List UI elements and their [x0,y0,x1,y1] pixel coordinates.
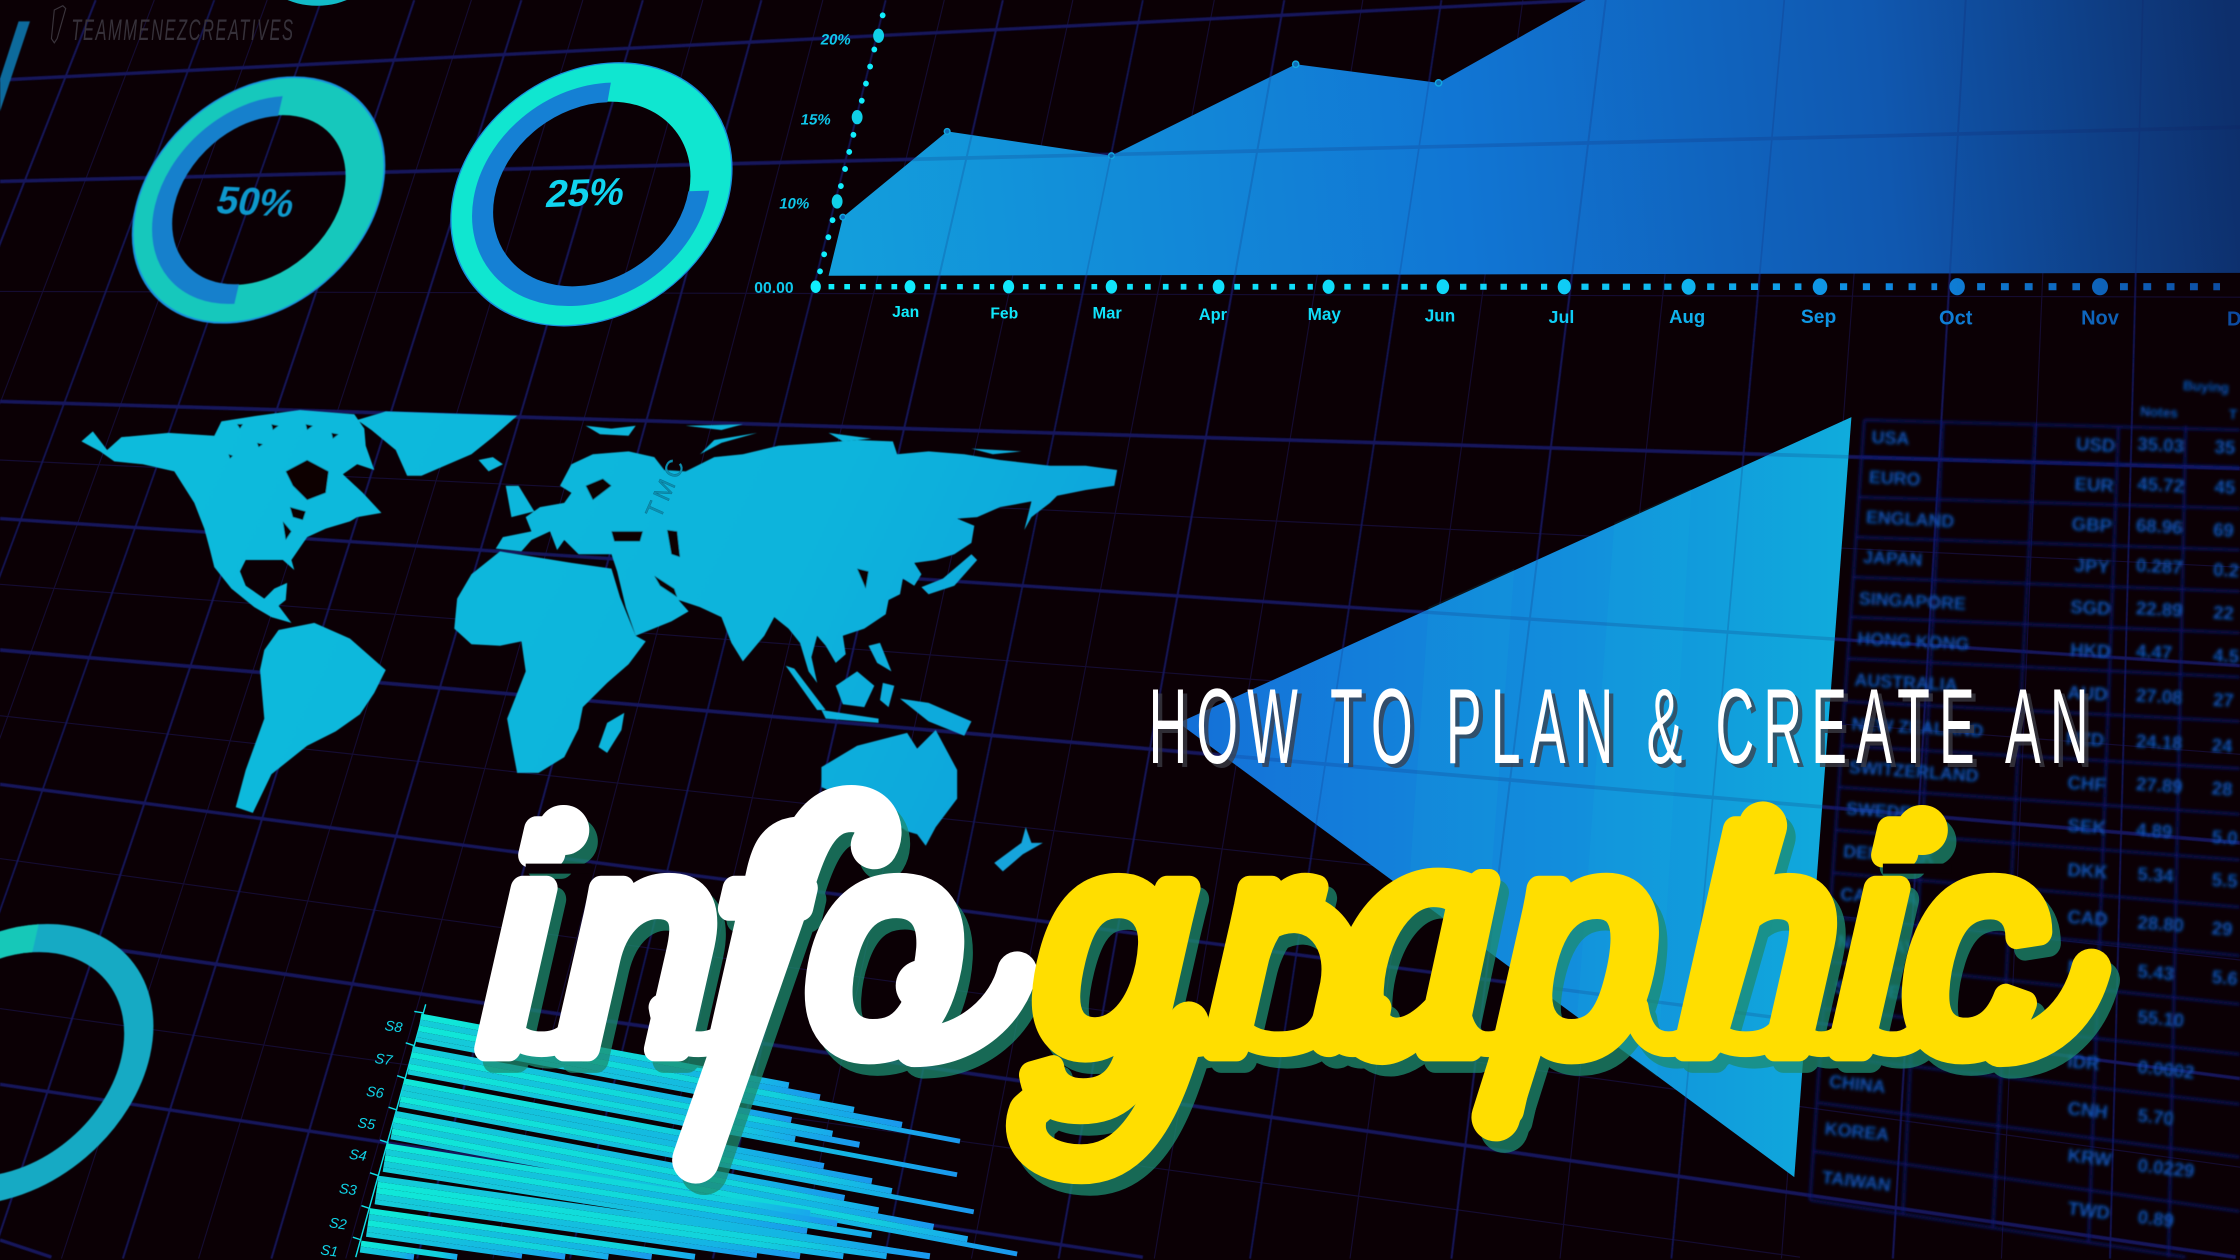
currency codes: KRW [2067,1145,2113,1170]
triangle [1179,417,1851,1177]
currency codes: CHF [2067,772,2106,795]
country names: SWITZERLAND [1848,757,1979,786]
subtitle text: HOW TO PLAN & CREATE AN [1149,665,2089,786]
rate values: 24.18 [2136,730,2183,754]
faint watermark on map: TMC [641,452,692,522]
rate values: 5.43 [2137,960,2175,984]
second rate column: 45 [2214,476,2236,498]
partial bar at top left [0,21,30,111]
second rate column: 35 [2214,436,2236,458]
donut segment 50% [143,106,280,299]
rate values: 5.34 [2137,863,2175,887]
hudson bay and inland seas [229,424,869,597]
x axis month labels: Mar [1093,305,1122,323]
country names: USA [1871,427,1910,449]
currency codes: GBP [2071,513,2112,536]
donut rim 50% [109,71,408,329]
y axis dots [820,3,886,271]
ring highlight [0,938,35,1072]
country names: KOREA [1824,1118,1890,1145]
currency codes: SGD [2070,596,2111,619]
script swashes and joins [1026,826,2091,1164]
rate values: 4.47 [2136,640,2173,663]
country names: CANADA [1840,884,1918,909]
currency codes: CNH [2067,1097,2109,1122]
britain and ireland [506,486,534,517]
graphic text: graphic [1027,730,2054,1126]
bars [360,1014,1022,1260]
currency codes: HKD [2070,639,2111,662]
iceland [479,457,503,471]
donut rim 25% [432,60,751,329]
country names: SINGAPORE [1858,588,1966,614]
icon: pencil [51,6,66,43]
rate values: 4.89 [2135,819,2173,842]
series labels: S5 [357,1115,376,1134]
rate values: 68.96 [2136,514,2183,538]
rate values: 5.70 [2137,1105,2175,1129]
currency codes: TWD [2067,1197,2111,1223]
series labels: S6 [365,1084,385,1102]
grid seen through panels [911,0,2071,1098]
chart area [829,0,2240,276]
rate values: 0.0229 [2137,1155,2195,1181]
label 50%: 50% [212,179,299,226]
label 25%: 25% [543,171,628,216]
currency codes: EUR [2074,473,2115,496]
x axis month labels: Jul [1549,307,1574,327]
new zealand [994,827,1043,871]
x axis month labels: Sep [1801,307,1836,328]
partial donut at top edge [266,0,369,6]
rate values: 22.89 [2136,597,2183,621]
donut segment 25% [466,89,717,299]
graphic shadow [1034,742,2100,1176]
second rate column: 5.6 [2211,966,2239,989]
series labels [319,1018,403,1260]
x axis month labels: Nov [2081,307,2120,329]
country names: SWEDEN [1845,798,1925,824]
rate values: 35.03 [2137,433,2184,456]
ring [0,931,164,1198]
second rate column [2211,436,2240,989]
donut: 50% [109,71,408,329]
table grid [1810,420,2240,1257]
title: graphic [1026,730,2100,1176]
currency codes: JPY [2074,554,2111,577]
y axis labels: 20% [819,31,853,48]
x axis month labels: Oct [1939,307,1973,329]
currency table [1810,378,2240,1257]
x axis month labels: Jun [1425,305,1455,325]
script swashes and joins [501,809,1017,1160]
rate values: 27.89 [2135,773,2183,797]
subtitle shadow: HOW TO PLAN & CREATE AN [1153,670,2093,790]
axis [356,1004,426,1257]
currency codes: NZD [2066,727,2105,750]
rate values: 0.0002 [2137,1056,2195,1083]
series labels: S2 [328,1215,348,1234]
title: info [478,775,1026,1171]
second rate column: 29 [2211,917,2233,940]
rate values: 27.08 [2136,684,2183,708]
x axis month nodes [811,278,2108,295]
area chart [754,0,2240,331]
y axis labels: 10% [778,196,811,213]
x axis month labels: May [1308,304,1341,324]
currency codes: AUD [2067,682,2108,705]
currency codes: NOK [2067,956,2110,980]
donut ring 25% [454,79,729,310]
second rate column: 69 [2213,519,2234,541]
arctic islands [586,424,1021,454]
country names: NORWAY [1837,931,1917,958]
rate values [2135,433,2195,1231]
currency codes: SEK [2067,814,2107,838]
series labels: S4 [348,1147,368,1165]
table headers [2140,378,2238,422]
country names: CHINA [1828,1071,1887,1097]
rate values: 55.10 [2137,1006,2185,1031]
country names: ENGLAND [1866,507,1955,531]
info lettering [478,775,1017,1160]
graphic lettering [1026,730,2091,1164]
eurasia [496,440,1117,683]
currency codes [2066,433,2116,1223]
x axis month labels: Jan [892,304,919,321]
data nodes [840,61,1442,220]
south america [236,623,386,813]
second rate column: 4.5 [2213,644,2240,667]
triangle panel stripes [1409,489,1691,1077]
x axis month labels [892,304,2240,331]
country names: JAPAN [1863,547,1923,570]
country names: TAIWAN [1821,1167,1892,1195]
subtitle [1149,665,2093,790]
gap under the i dot [1883,865,1951,872]
x axis dots [829,285,2220,289]
rate values: 28.80 [2137,912,2185,936]
x axis month labels: Apr [1199,306,1228,324]
indonesia and philippines [786,643,971,736]
north america [81,410,381,623]
country names: EURO [1868,467,1921,490]
second rate column: 5.5 [2211,869,2238,892]
axis ticks [353,1011,423,1240]
series labels: S3 [338,1181,358,1199]
second rate column: 22 [2213,602,2234,624]
bottom-left donut [0,931,164,1198]
gap under the i dot [526,865,591,872]
country names: AUSTRALIA [1854,670,1958,695]
triangle panel [1179,417,1851,1177]
second rate column: 28 [2211,777,2233,800]
series labels: S8 [384,1018,403,1036]
currency codes: DKK [2067,859,2109,883]
watermark text: TEAMMENEZCREATIVES [71,14,293,47]
horizontal bar chart [319,1004,1022,1260]
country names: NEW ZEALAND [1851,714,1984,741]
second rate column: 24 [2211,734,2234,757]
y axis labels: 00.00 [754,280,794,297]
second rate column: 0.2 [2213,559,2240,581]
madagascar [599,713,624,753]
currency codes: USD [2076,433,2116,456]
world map [81,410,1117,871]
country names: DENMARK [1843,841,1935,868]
x axis month labels: Aug [1669,306,1705,327]
table headers: T [2228,407,2238,422]
table headers: Notes [2140,404,2178,421]
info text: info [478,775,970,1114]
australia [821,730,957,846]
rate values: 0.89 [2137,1206,2175,1231]
country names: SWEDEN [1834,977,1914,1004]
rate values: 0.287 [2136,554,2183,578]
country names: HONG KONG [1857,628,1970,654]
africa [454,551,646,773]
x axis month labels: Feb [990,306,1018,323]
country names [1821,427,1984,1195]
table headers: Buying [2183,378,2229,395]
donut ring 50% [131,91,386,309]
donut: 25% [432,60,751,329]
greenland [357,411,517,476]
second rate column: 5.0 [2211,826,2238,849]
y axis labels [754,31,853,297]
info shadow [487,787,1026,1171]
second rate column: 27 [2213,689,2234,711]
y axis labels: 15% [799,111,833,128]
watermark: teammenezcreatives [51,6,293,47]
currency codes: CAD [2067,906,2108,930]
japan [921,554,977,594]
currency codes: IDR [2067,1050,2101,1074]
rate values: 45.72 [2137,473,2184,496]
series labels: S7 [374,1051,394,1069]
